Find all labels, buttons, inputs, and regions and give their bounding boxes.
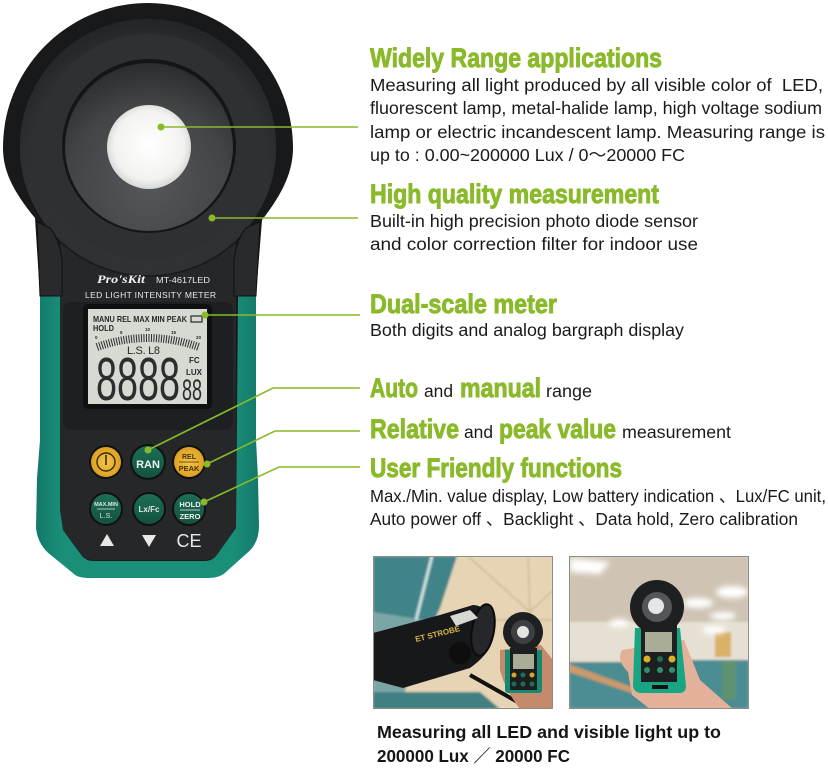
Lx/Fc button <box>132 492 166 526</box>
heading: Auto and manual range: and <box>424 381 453 401</box>
LCD hold label: HOLD <box>93 323 114 333</box>
hand holding meter <box>620 640 733 709</box>
text block: functions description <box>370 486 826 529</box>
MAX MIN button: L.S. <box>100 513 112 520</box>
text block: functions description: Auto power off 、Backlight 、Data hold, Zero calibration <box>370 509 798 529</box>
heading: Relative and peak value measurement <box>370 414 731 444</box>
leader line: RAN button <box>144 388 360 454</box>
meter black head and body <box>3 3 293 561</box>
heading: Relative and peak value measurement: Relative <box>370 414 459 444</box>
caption: 200000 Lux ／ 20000 FC <box>377 746 570 766</box>
heading: User Friendly functions: User Friendly functions <box>370 453 622 483</box>
LCD scale numbers: 10 <box>145 327 151 332</box>
hand holding meter <box>500 645 553 709</box>
ceiling lights <box>570 558 748 634</box>
Lx/Fc button: Lx/Fc <box>139 505 160 514</box>
brand label: Pro'sKit <box>97 272 146 286</box>
text block: range description <box>370 75 825 165</box>
heading: Relative and peak value measurement: and <box>464 422 493 442</box>
LCD analog bargraph <box>97 338 199 347</box>
REL PEAK button: REL <box>182 454 197 461</box>
HOLD ZERO button: ZERO <box>180 512 201 521</box>
text block: display description: Both digits and analog bargraph display <box>370 320 684 340</box>
heading: Relative and peak value measurement: peak value <box>499 414 616 444</box>
leader line: display <box>202 312 360 318</box>
LCD scale numbers: 0 <box>95 335 98 340</box>
leader line: HOLD button <box>200 467 360 506</box>
sensor white dome <box>107 105 191 189</box>
HOLD ZERO button <box>172 492 206 526</box>
text block: range description: lamp or electric incandescent lamp. Measuring range is <box>370 122 825 142</box>
meter outer ring <box>19 18 277 276</box>
LCD surround <box>63 302 233 430</box>
text block: range description: fluorescent lamp, metal-halide lamp, high voltage sodium <box>370 98 822 118</box>
heading: Widely Range applications: Widely Range applications <box>370 43 662 73</box>
photo: meter held in office <box>569 556 749 709</box>
LCD scale numbers: 15 <box>171 330 177 335</box>
LCD scale numbers: 5 <box>120 330 123 335</box>
meter body front plate <box>60 238 236 560</box>
leader line: sensor dome <box>158 124 358 130</box>
product name label: LED LIGHT INTENSITY METER <box>85 290 216 300</box>
small meter <box>630 580 686 693</box>
caption: Measuring all LED and visible light up to <box>377 722 721 742</box>
sensor lens recess <box>62 59 236 233</box>
caption <box>377 722 721 766</box>
text block: sensor description <box>370 211 698 254</box>
text block: sensor description: and color correction filter for indoor use <box>370 234 698 254</box>
icon: up triangle <box>100 534 114 546</box>
MAX MIN button <box>89 492 123 526</box>
heading: Auto and manual range: Auto <box>370 373 418 403</box>
leader line: REL PEAK button <box>204 431 360 468</box>
REL PEAK button: PEAK <box>179 464 200 473</box>
LCD main digits: 8888 <box>96 346 180 413</box>
LCD scale mode: L.S. L8 <box>127 345 160 357</box>
photo: meter beside studio flash <box>373 556 553 709</box>
small meter <box>503 612 543 693</box>
power button <box>89 445 123 479</box>
icon: down triangle <box>142 535 156 547</box>
text block: range description: Measuring all light produced by all visible color of LED, <box>370 75 823 95</box>
LCD scale numbers <box>95 327 202 340</box>
text block: sensor description: Built-in high precision photo diode sensor <box>370 211 698 231</box>
heading: Relative and peak value measurement: measurement <box>622 422 731 442</box>
light meter device <box>3 3 293 578</box>
LCD battery icon <box>191 316 202 322</box>
text block: range description: up to : 0.00~200000 Lux / 0～20000 FC <box>370 145 685 165</box>
flash brand text: ET STROBE <box>414 624 462 644</box>
studio flash unit <box>374 603 516 704</box>
LCD unit labels: FC <box>189 356 200 365</box>
heading: Auto and manual range: range <box>546 381 592 401</box>
LCD display <box>88 309 207 413</box>
REL PEAK button <box>172 445 206 479</box>
side shoulder bezels <box>37 222 260 296</box>
heading: High quality measurement: High quality measurement <box>370 179 659 209</box>
model label: MT-4617LED <box>156 275 210 285</box>
MAX MIN button: MAX.MIN <box>94 502 118 508</box>
leader line: housing <box>208 214 358 222</box>
heading: Auto and manual range <box>370 373 592 403</box>
meter green rubber housing <box>36 285 259 578</box>
LCD scale numbers: 20 <box>196 335 202 340</box>
RAN button: RAN <box>136 459 160 471</box>
RAN button <box>130 444 166 480</box>
LCD small digits: 88 <box>182 374 202 407</box>
LCD mode labels: MANU REL MAX MIN PEAK <box>93 314 188 324</box>
heading: Dual-scale meter: Dual-scale meter <box>370 289 557 319</box>
HOLD ZERO button: HOLD <box>179 500 201 509</box>
CE mark: CE <box>176 531 202 551</box>
LCD display: LUX <box>186 368 203 377</box>
heading: Auto and manual range: manual <box>460 373 541 403</box>
